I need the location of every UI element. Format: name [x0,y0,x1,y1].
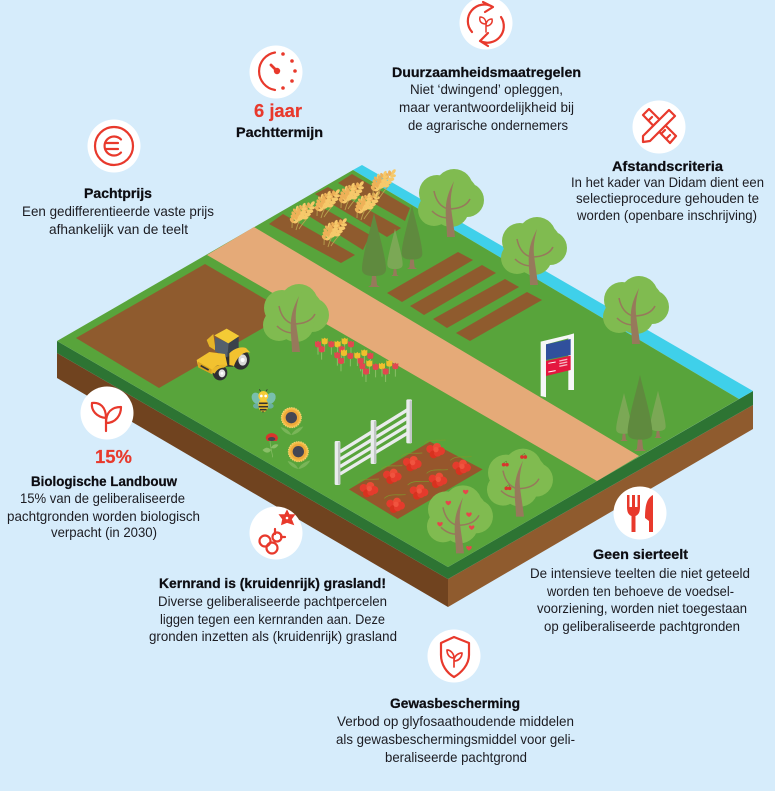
text block: Niet ‘dwingend’ opleggen, [410,81,563,97]
conifers front [616,375,666,451]
icon: bee and flower [250,506,302,560]
text block: selectieprocedure gehouden te [576,190,759,206]
text block [571,174,764,223]
text block: beraliseerde pachtgrond [385,749,527,765]
tomato bed [349,440,483,519]
text block [399,81,574,133]
sunflowers [281,408,310,469]
tractor [197,329,250,380]
tulips [315,338,398,382]
text block [149,593,397,644]
dirt road [207,227,639,481]
text block [7,490,200,540]
text block: De intensieve teelten die niet geteeld [530,565,750,581]
text block: op geliberaliseerde pachtgronden [544,618,740,634]
water strip [353,165,753,399]
icon: cycle with sprout [460,0,512,50]
value: 6 jaar [254,101,302,121]
ploughed plot [76,264,289,388]
icon: euro [88,120,140,172]
text block: de agrarische ondernemers [408,117,568,133]
apple tree [427,485,493,553]
text block: pachtgronden worden biologisch [7,508,200,524]
ladybug [263,433,278,457]
text block: gronden inzetten als (kruidenrijk) grasland [149,628,397,644]
heading: Afstandscriteria [612,158,723,174]
panel: pachttermijn [236,46,323,140]
heading: Pachtprijs [84,185,152,201]
isometric farm field [57,165,753,607]
panel: geen sierteelt [530,486,750,634]
crop strips [269,174,542,341]
fence [335,399,412,485]
text block: verpacht (in 2030) [51,524,157,540]
text block: als gewasbeschermingsmiddel voor geli- [336,731,575,747]
sign [541,333,574,397]
text block: 15% van de geliberaliseerde [20,490,185,506]
text block: worden ten behoeve de voedsel- [546,583,734,599]
soil side right [448,405,753,607]
text block: Verbod op glyfosaathoudende middelen [337,713,574,729]
conifers back [362,205,422,287]
icon: sprout [80,386,134,440]
panel: afstandscriteria [571,100,764,223]
text block: afhankelijk van de teelt [49,221,188,237]
soil side left [57,353,448,607]
cherry tree [487,449,553,517]
icon: ruler and pencil [632,100,686,154]
text block [336,713,575,765]
trees [263,169,669,352]
panel: duurzaamheidsmaatregelen [392,0,581,133]
icon: shield with sprout [428,630,480,682]
text block: voorziening, worden niet toegestaan [537,600,747,616]
panel: gewasbescherming [336,630,575,765]
text block: liggen tegen een kernranden aan. Deze [160,611,385,627]
wheat [288,166,400,247]
text block: Een gedifferentieerde vaste prijs [22,203,214,219]
panel: biologische landbouw [7,386,200,540]
grass edge [57,341,753,579]
icon: fork and knife [614,486,666,540]
text block: Diverse geliberaliseerde pachtpercelen [158,593,387,609]
text block [530,565,750,634]
grass top [57,170,739,567]
heading: Geen sierteelt [593,546,688,562]
heading: Biologische Landbouw [31,473,177,489]
heading: Duurzaamheidsmaatregelen [392,64,581,80]
text block: worden (openbare inschrijving) [576,207,757,223]
text block: In het kader van Didam dient een [571,174,764,190]
text block [22,203,214,237]
text block: maar verantwoordelijkheid bij [399,99,574,115]
icon: gauge [250,46,302,98]
heading: Kernrand is (kruidenrijk) grasland! [159,575,386,591]
bottom field elements [250,389,553,553]
value: 15% [95,447,132,467]
panel: kernrand [149,506,397,644]
bee [250,389,278,413]
panel: pachtprijs [22,120,214,237]
heading: Pachttermijn [236,124,323,140]
heading: Gewasbescherming [390,695,520,711]
